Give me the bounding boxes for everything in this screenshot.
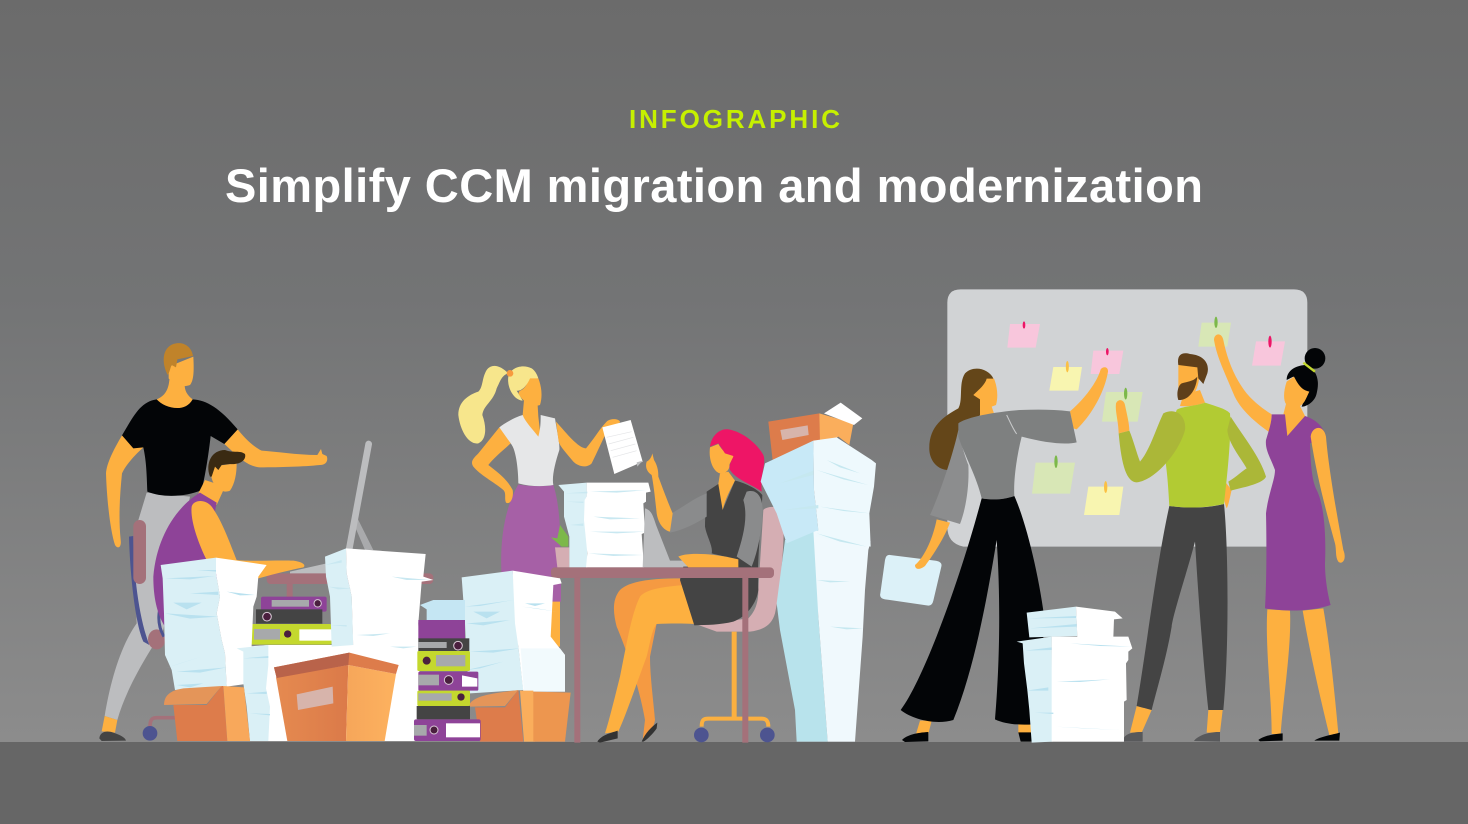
laptop [643,508,692,567]
low paper stack beside box [237,645,418,741]
scene: desk with seated woman and tall paper stack [458,366,876,743]
paper stack on desk [558,483,651,567]
tall paper stack [761,437,876,742]
paper stack left of centre [161,558,267,690]
whiteboard [947,289,1307,547]
scene: sticky-note board and team [880,289,1345,743]
title: Simplify CCM migration and modernization [225,159,1203,212]
binder column with loose paper [414,600,481,741]
desk monitor [267,444,433,597]
sticky notes [1007,317,1285,515]
paper stack with box, centre left [462,571,571,742]
person: standing man in black t-shirt [99,343,327,741]
potted plant [551,525,569,567]
chair [694,507,784,742]
desk [551,567,774,743]
paper stack near team [1017,607,1132,743]
floor [0,742,1468,824]
cardboard box, front centre [274,653,399,741]
eyebrow label: INFOGRAPHIC [629,104,840,134]
cardboard box on tall stack [768,403,862,461]
office chair of seated man [129,520,178,741]
person: seated man in purple top [153,450,304,627]
person: woman with long brown hair and tablet [880,367,1108,742]
cardboard box, front left [164,686,250,741]
person: bearded man in green sweater [1116,353,1266,742]
person: woman in purple dress [1214,334,1345,741]
binder stack on desk [250,597,332,645]
person: blonde woman handing a document [458,366,620,647]
large paper stack behind centre box [325,548,433,741]
scene: seated man, standing man, binders and paper piles [99,343,481,741]
person: seated woman with pink hair [597,429,764,743]
document held by blonde woman [602,420,643,474]
